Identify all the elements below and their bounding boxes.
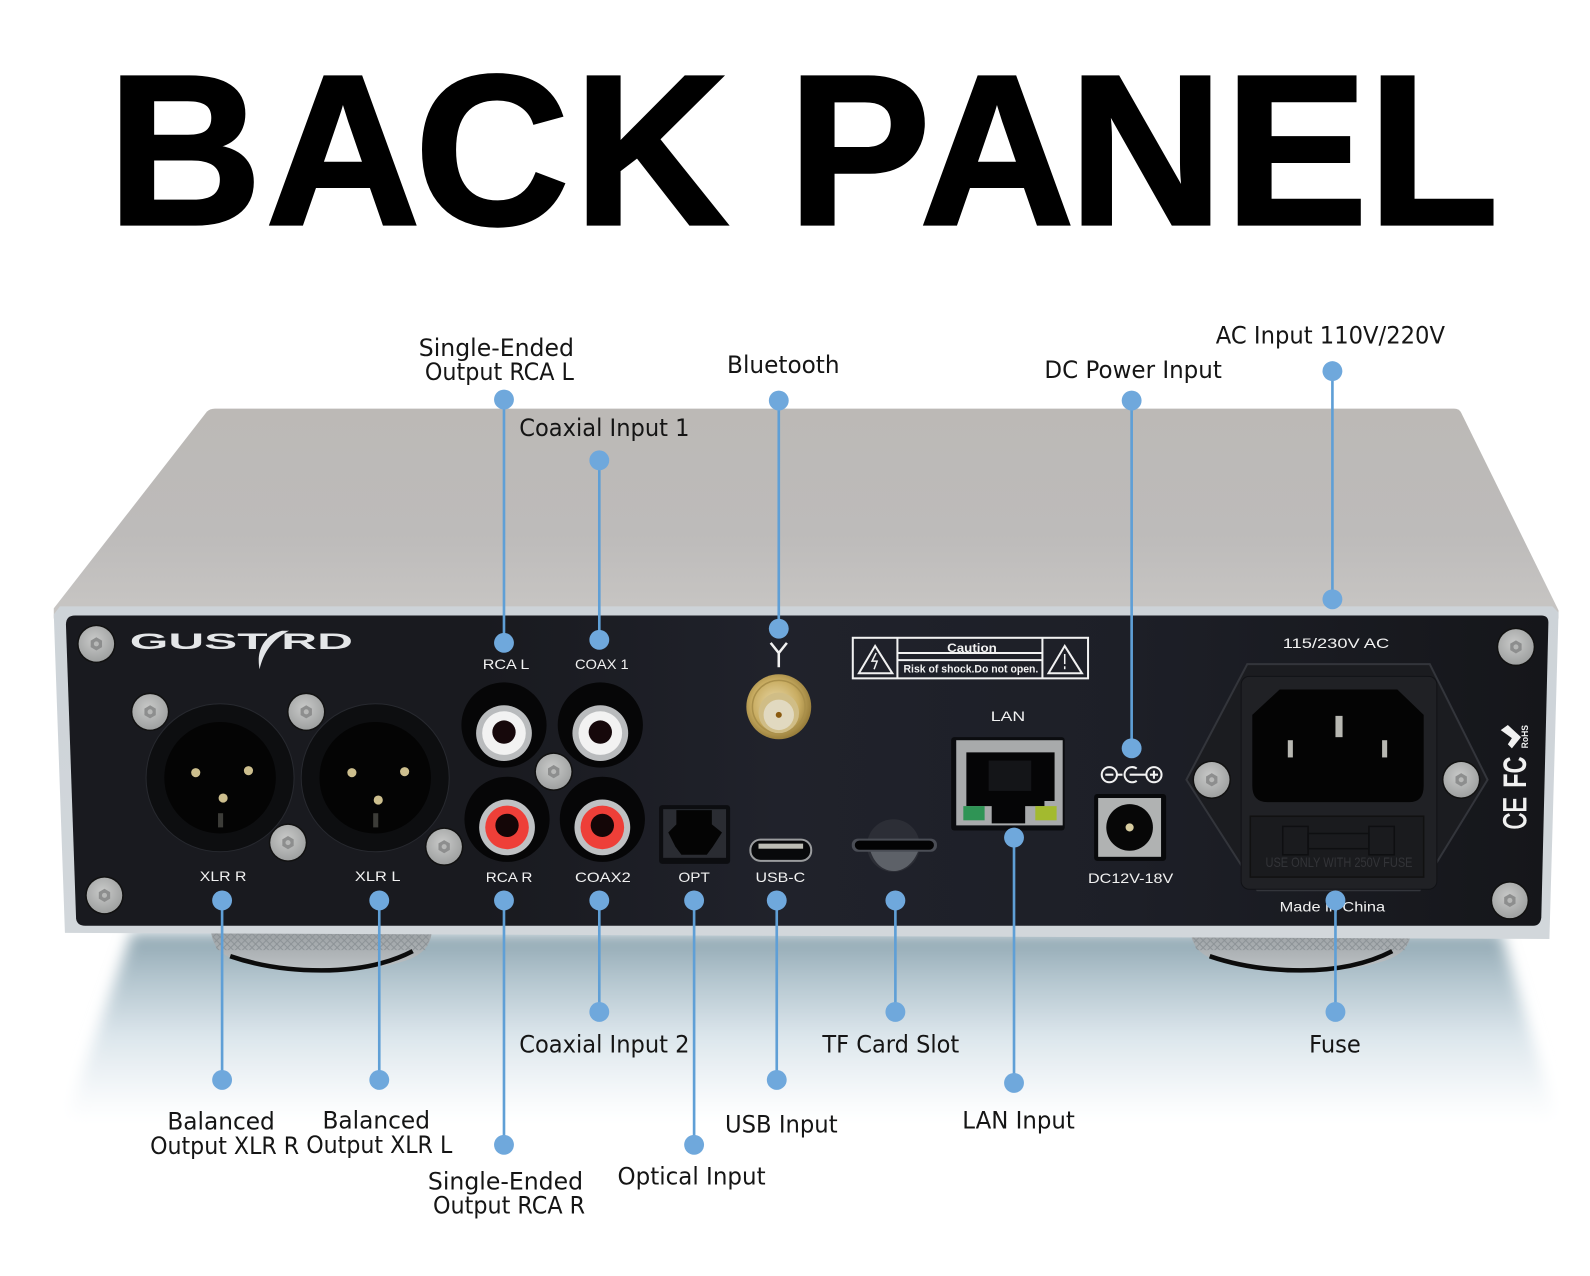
label: LAN Input: LAN Input bbox=[962, 1107, 1075, 1135]
connector: optical bbox=[659, 805, 730, 864]
connector: DC jack bbox=[1094, 794, 1166, 861]
callout leader lines and dots bbox=[212, 361, 1345, 1155]
connector: TF card slot bbox=[852, 819, 937, 872]
label: AC Input: AC Input 110V/220V bbox=[1216, 322, 1446, 350]
title: K bbox=[574, 31, 728, 270]
compliance marks: RoHS bbox=[1520, 725, 1530, 748]
title: L bbox=[1368, 31, 1499, 270]
label: Balanced Output XLR R: Output XLR R bbox=[150, 1132, 299, 1160]
panel text labels: Made in China bbox=[1280, 900, 1385, 916]
connector: XLR L bbox=[301, 704, 449, 852]
panel text labels: 115/230V AC bbox=[1283, 636, 1389, 652]
foot: right bbox=[1190, 931, 1412, 971]
panel text labels: USB-C bbox=[755, 870, 805, 886]
panel text labels: OPT bbox=[678, 870, 710, 886]
panel text labels: RCA L bbox=[483, 657, 529, 673]
label: USB Input: USB Input bbox=[725, 1111, 838, 1139]
panel text labels: DC12V-18V bbox=[1088, 871, 1174, 887]
caution label bbox=[853, 638, 1088, 678]
panel text labels bbox=[200, 636, 1389, 916]
caution label: Caution bbox=[947, 641, 997, 655]
front bezel bbox=[54, 606, 1559, 939]
logo: GUSTARD bbox=[130, 629, 353, 669]
label: Balanced Output XLR R bbox=[150, 1108, 299, 1160]
screw: RCA centre bbox=[534, 752, 573, 791]
label: Fuse: Fuse bbox=[1309, 1031, 1361, 1059]
reflection on table bbox=[66, 933, 1557, 1120]
label: Bluetooth: Bluetooth bbox=[727, 351, 840, 379]
label: Single-Ended Output RCA R: Single-Ended bbox=[428, 1167, 583, 1195]
label: Single-Ended Output RCA L: Output RCA L bbox=[425, 358, 575, 386]
icon: DC polarity bbox=[1102, 767, 1162, 782]
title: B bbox=[108, 31, 262, 270]
connector: RCA L bbox=[461, 682, 547, 768]
connector: RCA R bbox=[464, 777, 550, 862]
connector: COAX 2 bbox=[560, 777, 645, 862]
icon: antenna bbox=[771, 643, 787, 667]
chassis top surface bbox=[54, 409, 1559, 619]
title: E bbox=[1225, 31, 1368, 270]
title: A bbox=[266, 31, 420, 270]
compliance marks: FC bbox=[1497, 756, 1533, 788]
compliance marks: CE bbox=[1497, 797, 1533, 829]
connector: XLR R bbox=[146, 704, 294, 852]
label: Coaxial Input 2: Coaxial Input 2 bbox=[519, 1031, 690, 1059]
panel text labels: RCA R bbox=[486, 870, 532, 886]
panel text labels: COAX 1 bbox=[575, 657, 629, 673]
black front plate bbox=[66, 615, 1548, 926]
connector: USB-C bbox=[750, 840, 811, 861]
title: A bbox=[920, 31, 1074, 270]
panel text labels: XLR R bbox=[200, 869, 246, 885]
connector: bluetooth SMA bbox=[746, 674, 811, 739]
logo: GUSTARD: GUST RD bbox=[130, 629, 353, 654]
label: TF Card Slot: TF Card Slot bbox=[821, 1031, 959, 1059]
connector: LAN bbox=[951, 737, 1065, 830]
label: Coaxial Input 1: Coaxial Input 1 bbox=[519, 414, 690, 442]
label: Single-Ended Output RCA L bbox=[419, 334, 575, 386]
label: Balanced Output XLR L: Output XLR L bbox=[306, 1131, 453, 1159]
label: Balanced Output XLR L bbox=[306, 1107, 453, 1159]
label: Balanced Output XLR L: Balanced bbox=[322, 1107, 430, 1135]
caution label: Risk of shock.Do not open. bbox=[903, 663, 1038, 675]
title: C bbox=[415, 31, 569, 270]
compliance marks bbox=[1497, 725, 1533, 829]
connector: IEC AC inlet with fuse: USE ONLY WITH 250V FUSE bbox=[1265, 855, 1413, 871]
panel text labels: COAX2 bbox=[575, 870, 631, 886]
screws over XLR bbox=[269, 693, 326, 862]
label: Single-Ended Output RCA L: Single-Ended bbox=[419, 334, 574, 362]
title: N bbox=[1069, 31, 1223, 270]
device: audio unit back panel bbox=[54, 409, 1559, 971]
connector: IEC AC inlet with fuse bbox=[1186, 664, 1488, 890]
label: Single-Ended Output RCA R: Output RCA R bbox=[433, 1192, 585, 1220]
label: Single-Ended Output RCA R bbox=[428, 1167, 585, 1220]
panel text labels: XLR L bbox=[355, 869, 401, 885]
connector: COAX 1 bbox=[558, 682, 643, 768]
title: P bbox=[788, 31, 931, 270]
label: DC Power Input: DC Power Input bbox=[1044, 356, 1222, 384]
foot: left bbox=[211, 931, 432, 971]
label: Balanced Output XLR R: Balanced bbox=[167, 1108, 275, 1136]
panel text labels: LAN bbox=[991, 709, 1025, 725]
label: Optical Input: Optical Input bbox=[618, 1162, 766, 1190]
screws bbox=[77, 625, 1535, 920]
